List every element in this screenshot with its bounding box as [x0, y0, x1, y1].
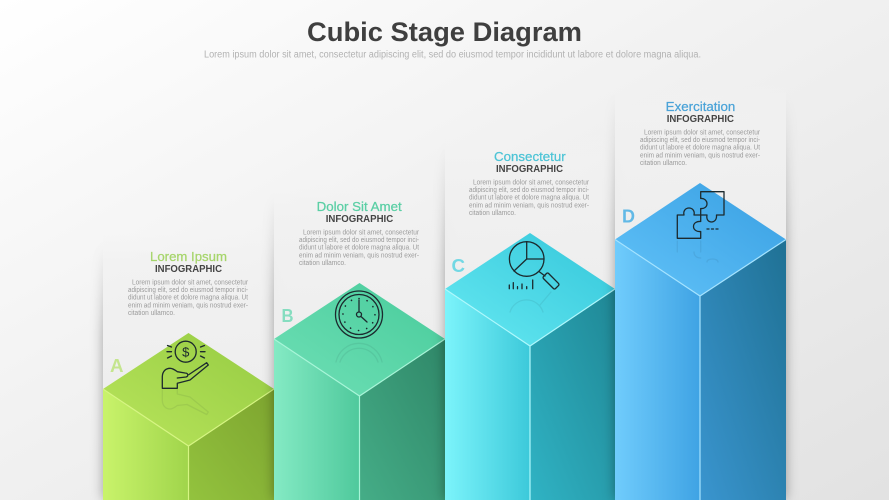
panel C background: [445, 133, 615, 293]
letter B: B: [282, 306, 294, 326]
stage D column: [615, 83, 786, 500]
subheading D: INFOGRAPHIC: [667, 114, 734, 125]
body text A: [128, 280, 249, 317]
heading C: Consectetur: [494, 149, 566, 164]
body text A: didunt ut labore et dolore magna aliqua. Ut: [128, 295, 248, 302]
body text C: Lorem ipsum dolor sit amet, consectetur: [473, 180, 590, 186]
letter A: A: [110, 356, 124, 376]
icon reflection B: [336, 343, 382, 362]
body text C: enim ad minim veniam, quis nostrud exer-: [469, 202, 590, 209]
heading B: Dolor Sit Amet: [317, 199, 402, 214]
title: Cubic Stage Diagram: [307, 17, 582, 47]
body text B: adipiscing elit, sed do eiusmod tempor inci-: [299, 237, 420, 244]
heading D: Exercitation: [666, 99, 735, 114]
panel A background: [103, 233, 274, 393]
icon reflection A: [162, 389, 208, 414]
cube C: [445, 233, 615, 500]
body text A: citation ullamco.: [128, 310, 175, 317]
icon reflection D: [677, 241, 718, 262]
cube B: [274, 283, 445, 500]
letter C: C: [452, 256, 465, 276]
panel B background: [274, 183, 445, 343]
stage A column: [103, 233, 274, 500]
body text C: adipiscing elit, sed do eiusmod tempor inci-: [469, 187, 590, 194]
subheading B: INFOGRAPHIC: [326, 214, 393, 225]
body text B: enim ad minim veniam, quis nostrud exer-: [299, 252, 420, 259]
letter D: D: [622, 206, 635, 226]
subheading A: INFOGRAPHIC: [155, 264, 222, 275]
icon: hand holding coin: [162, 341, 208, 388]
body text B: Lorem ipsum dolor sit amet, consectetur: [303, 230, 420, 236]
stage C column: [445, 133, 615, 500]
body text A: adipiscing elit, sed do eiusmod tempor inci-: [128, 287, 249, 294]
body text D: enim ad minim veniam, quis nostrud exer-: [640, 152, 761, 159]
body text A: Lorem ipsum dolor sit amet, consectetur: [132, 280, 249, 286]
icon reflection C: [510, 292, 551, 312]
body text B: [299, 230, 420, 267]
icon: hand holding coin: $: [182, 344, 190, 360]
body text B: citation ullamco.: [299, 260, 346, 267]
panel D background: [615, 83, 786, 243]
heading A: Lorem Ipsum: [150, 249, 227, 264]
body text C: citation ullamco.: [469, 210, 516, 217]
stage B column: [274, 183, 445, 500]
icon: magnifier with pie chart: [509, 242, 560, 290]
body text C: [469, 180, 590, 217]
body text D: didunt ut labore et dolore magna aliqua. Ut: [640, 145, 760, 152]
body text B: didunt ut labore et dolore magna aliqua. Ut: [299, 245, 419, 252]
icon: puzzle pieces: [677, 192, 724, 238]
subheading C: INFOGRAPHIC: [496, 164, 563, 175]
body text D: [640, 130, 761, 167]
body text D: Lorem ipsum dolor sit amet, consectetur: [644, 130, 761, 136]
subtitle: Lorem ipsum dolor sit amet, consectetur adipiscing elit, sed do eiusmod tempor incididunt ut labore et dolore magna aliqua.: [204, 50, 701, 60]
body text D: adipiscing elit, sed do eiusmod tempor inci-: [640, 137, 761, 144]
cube A: [103, 333, 274, 500]
body text C: didunt ut labore et dolore magna aliqua. Ut: [469, 195, 589, 202]
body text A: enim ad minim veniam, quis nostrud exer-: [128, 302, 249, 309]
icon: clock: [336, 291, 382, 338]
cube D: [615, 183, 786, 500]
body text D: citation ullamco.: [640, 160, 687, 167]
